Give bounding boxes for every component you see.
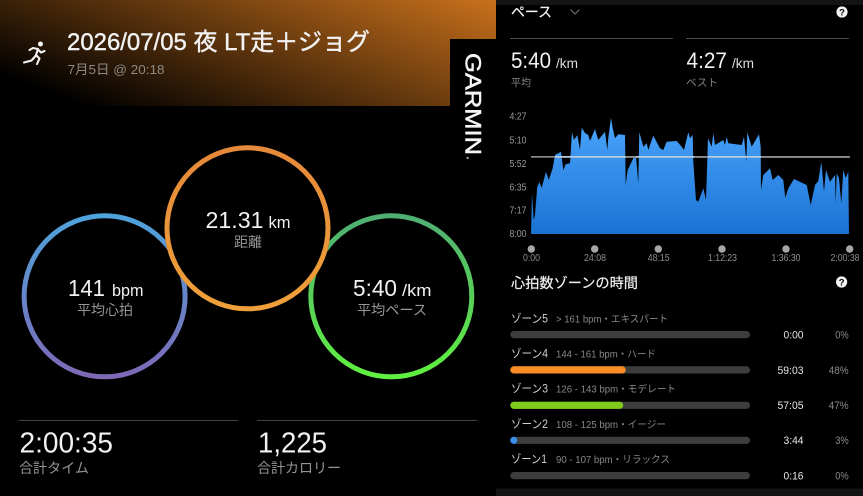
icon: runner (24, 42, 44, 64)
ring: average heart rate: 141 (68, 275, 105, 301)
title: 2026/07/05 夜 LT走＋ジョグ (67, 29, 370, 56)
chart y axis labels: 8:00 (510, 229, 527, 240)
chart x axis: 24:08 (584, 253, 606, 264)
icon: zones help (836, 276, 847, 288)
heading: heart rate zones: 心拍数ゾーンの時間 (511, 275, 638, 291)
chart y axis labels (510, 112, 527, 240)
icon: chevron (570, 10, 580, 14)
stat: best pace (686, 38, 849, 89)
stat: average pace: 平均 (511, 76, 531, 89)
ring: distance: 21.31 (206, 207, 264, 233)
ring: distance: 距離 (234, 234, 262, 250)
zone 1 row: 90 - 107 bpm・リラックス (556, 454, 670, 466)
panel: activity header (0, 0, 496, 106)
zone 4 row (510, 348, 849, 377)
stat: best pace: /km (732, 56, 754, 71)
ring: average heart rate: 平均心拍 (77, 302, 133, 318)
stat: average pace (510, 38, 673, 89)
zone 4 row: 144 - 161 bpm・ハード (556, 350, 656, 361)
chart y axis labels: 4:27 (510, 112, 527, 122)
ring: distance (164, 145, 330, 311)
ring: average heart rate (24, 216, 185, 377)
zone 1 row: 0:16 (784, 470, 804, 482)
zone 4 row: 59:03 (778, 365, 804, 377)
zone 3 row: 126 - 143 bpm・モデレート (556, 383, 676, 396)
zone 5 row (510, 312, 849, 342)
zone 5 row: 0:00 (784, 330, 804, 342)
zone 2 row: ゾーン2 (511, 418, 548, 431)
chart x axis: 1:12:23 (708, 253, 737, 264)
zone 5 row: ゾーン5 (511, 312, 548, 326)
badge: Garmin logo (450, 39, 496, 164)
zone 2 row: 3:44 (784, 435, 804, 447)
stat: total calories: 1,225 (258, 427, 327, 459)
activity date: 7月5日 @ 20:18 (68, 62, 164, 77)
zone 1 row: 0% (835, 470, 849, 482)
chart average line (531, 156, 850, 158)
chart x axis: 1:36:30 (772, 253, 801, 264)
chart x axis: 0:00 (523, 253, 540, 264)
zone 5 row: > 161 bpm・エキスパート (556, 314, 668, 326)
zone 3 row: 47% (829, 400, 849, 412)
zone 3 row: 57:05 (778, 400, 804, 412)
ring: average pace (311, 216, 472, 377)
zone 5 row: 0% (835, 330, 849, 342)
chart y axis labels: 6:35 (510, 182, 527, 194)
zone 4 row: 48% (829, 365, 849, 377)
zone 3 row: ゾーン3 (511, 383, 548, 396)
stat: total calories (257, 420, 477, 476)
chart y axis labels: 5:52 (510, 159, 527, 170)
chart x axis: 48:15 (648, 253, 670, 264)
chart x axis (523, 245, 860, 264)
stat: total calories: 合計カロリー (257, 460, 341, 476)
panel: pace heading (496, 0, 863, 20)
ring: average pace: /km (402, 281, 432, 300)
stat: average pace: /km (556, 56, 578, 71)
chart: pace over time (510, 112, 860, 264)
chart x axis: 2:00:38 (830, 253, 860, 264)
stat: average pace: 5:40 (511, 48, 551, 73)
icon: pace help (836, 6, 848, 19)
stat: best pace: 4:27 (686, 48, 727, 73)
stat: best pace: ベスト (686, 77, 718, 89)
stat: total time: 合計タイム (19, 460, 89, 476)
panel: pace heading: ペース (511, 4, 552, 20)
ring: distance: km (268, 213, 290, 232)
stat: total time (19, 420, 238, 476)
icon: pace help: ? (839, 8, 845, 18)
icon: zones help: ? (839, 278, 845, 288)
badge: Garmin logo: GARMIN (460, 53, 486, 155)
zone 2 row: 108 - 125 bpm・イージー (556, 420, 666, 431)
ring: average pace: 平均ペース (357, 302, 427, 318)
zone 1 row: ゾーン1 (511, 453, 547, 466)
zone 4 row: ゾーン4 (511, 348, 549, 361)
chart y axis labels: 7:17 (510, 206, 527, 216)
zone 2 row (510, 418, 849, 447)
stat: total time: 2:00:35 (20, 427, 113, 459)
ring: average heart rate: bpm (112, 281, 144, 300)
zone 3 row (510, 383, 849, 412)
chart y axis labels: 5:10 (510, 136, 527, 146)
chart pace area (531, 118, 849, 234)
ring: average pace: 5:40 (353, 275, 397, 301)
zone 2 row: 3% (835, 435, 849, 447)
zone 1 row (510, 453, 849, 482)
